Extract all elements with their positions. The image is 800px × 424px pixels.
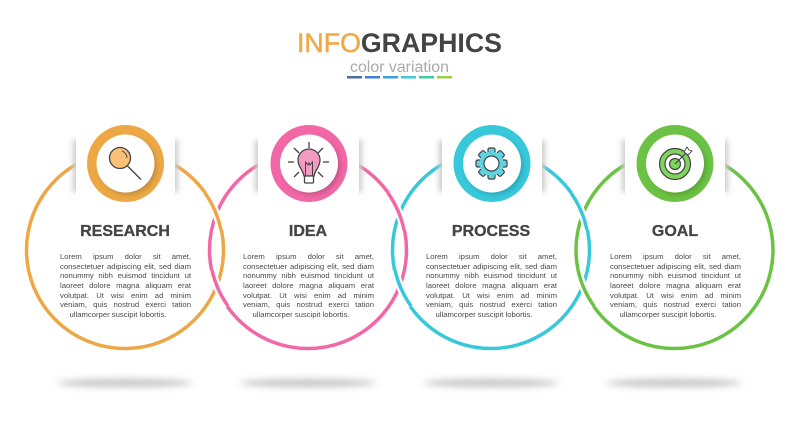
text block: process: consectetuer adipiscing elit, sed diam — [426, 262, 557, 271]
text block: goal: laoreet dolore magna aliquam erat — [610, 281, 741, 290]
panel: process — [390, 125, 592, 390]
text block: idea: nonummy nibh euismod tincidunt ut — [243, 271, 374, 280]
text block: research: Lorem ipsum dolor sit amet, — [60, 252, 191, 261]
text block: idea: Lorem ipsum dolor sit amet, — [243, 252, 374, 261]
heading: goal: GOAL — [652, 222, 698, 240]
text block: research: nonummy nibh euismod tincidunt ut — [60, 271, 191, 280]
text block: process: nonummy nibh euismod tincidunt ut — [426, 271, 557, 280]
text block: process: laoreet dolore magna aliquam erat — [426, 281, 557, 290]
text block: idea: ullamcorper suscipit lobortis. — [252, 310, 349, 319]
text block: idea: consectetuer adipiscing elit, sed diam — [243, 262, 374, 271]
icon: gear — [476, 148, 507, 179]
heading: idea: IDEA — [289, 222, 327, 240]
heading: process: PROCESS — [452, 222, 530, 240]
icon: magnifier — [110, 148, 141, 180]
text block: research: ullamcorper suscipit lobortis. — [70, 310, 166, 319]
title — [297, 28, 502, 78]
text block: process: Lorem ipsum dolor sit amet, — [426, 252, 557, 261]
icon: target — [660, 147, 692, 180]
text block: process: ullamcorper suscipit lobortis. — [436, 310, 532, 319]
text block: idea: laoreet dolore magna aliquam erat — [243, 281, 374, 290]
text block: research — [60, 252, 191, 319]
text block: process — [426, 252, 557, 319]
text block: goal: nonummy nibh euismod tincidunt ut — [610, 271, 741, 280]
text block: research: consectetuer adipiscing elit, sed diam — [60, 262, 191, 271]
panel: goal — [574, 125, 775, 390]
text block: idea: volutpat. Ut wisi enim ad minim — [243, 291, 374, 300]
panel: research — [24, 125, 226, 390]
text block: research: volutpat. Ut wisi enim ad minim — [60, 291, 191, 300]
text block: goal: Lorem ipsum dolor sit amet, — [610, 252, 741, 261]
title: color variation — [350, 59, 449, 76]
text block: goal: ullamcorper suscipit lobortis. — [620, 310, 716, 319]
text block: goal: veniam, quis nostrud exerci tation — [610, 300, 741, 309]
title: INFOGRAPHICS — [297, 28, 502, 58]
text block: goal: volutpat. Ut wisi enim ad minim — [610, 291, 741, 300]
text block: process: volutpat. Ut wisi enim ad minim — [426, 291, 557, 300]
icon: light bulb — [288, 142, 329, 183]
text block: research: veniam, quis nostrud exerci tation — [60, 300, 191, 309]
text block: goal — [610, 252, 741, 319]
text block: research: laoreet dolore magna aliquam erat — [60, 281, 191, 290]
text block: idea: veniam, quis nostrud exerci tation — [243, 300, 374, 309]
panel: idea — [208, 125, 408, 390]
text block: goal: consectetuer adipiscing elit, sed diam — [610, 262, 741, 271]
text block: process: veniam, quis nostrud exerci tation — [426, 300, 557, 309]
heading: research: RESEARCH — [80, 222, 170, 240]
text block: idea — [243, 252, 374, 319]
